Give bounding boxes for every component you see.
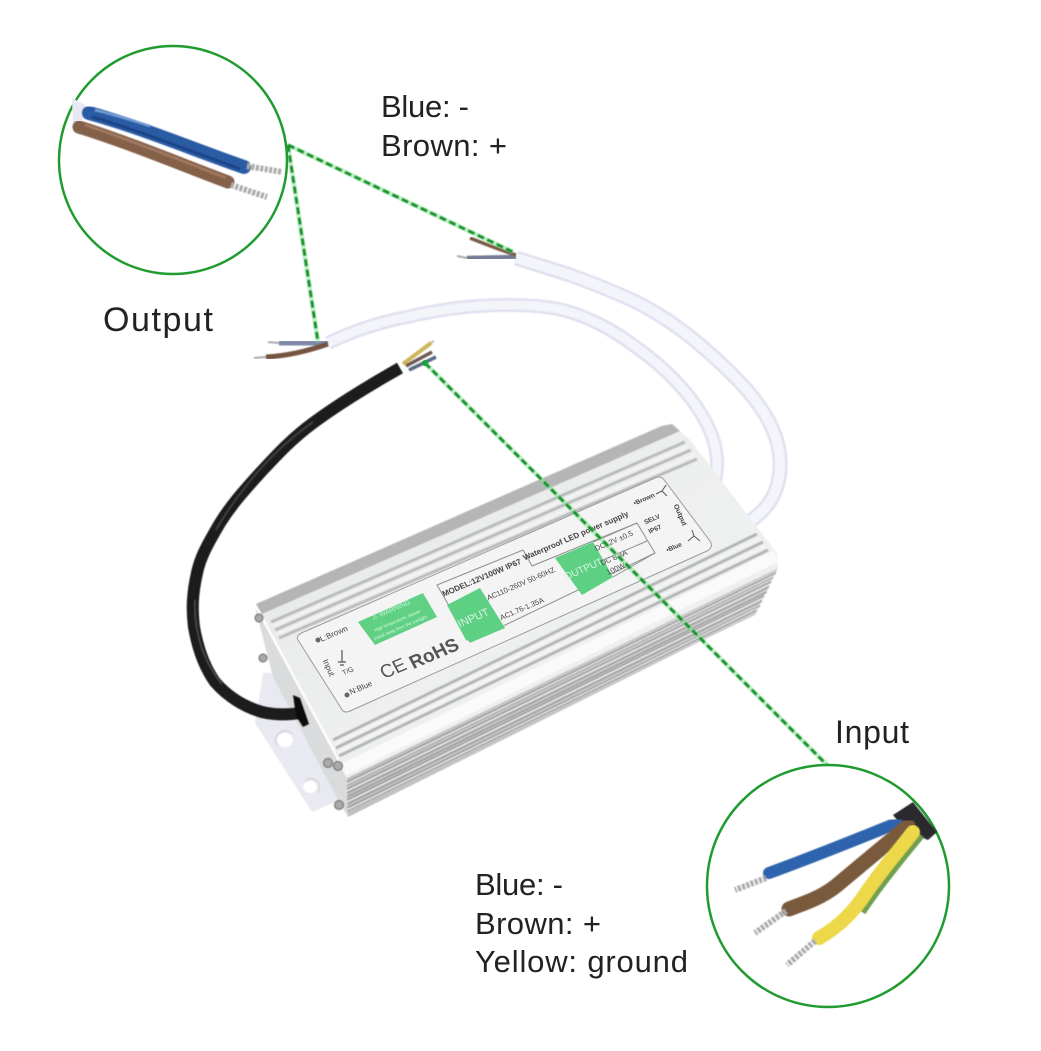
output side label: Output	[672, 503, 688, 528]
white output cable, outer	[516, 258, 780, 524]
ribbed side face	[347, 568, 778, 817]
input wires at black cable end	[403, 341, 436, 370]
RoHS mark: RoHS	[406, 635, 463, 674]
output detail circle	[59, 46, 287, 274]
power supply body	[255, 424, 778, 817]
neutral terminal: N:Blue	[348, 679, 374, 696]
blue wire	[735, 823, 897, 890]
input side label: Input	[321, 658, 337, 678]
input key line 1: Blue: -	[475, 867, 563, 902]
output wire colour key	[381, 89, 507, 163]
brown output terminal: •Brown	[632, 492, 656, 507]
ground symbol	[338, 650, 346, 665]
brown wire detail	[79, 125, 267, 197]
blue output terminal: •Blue	[665, 541, 684, 554]
CE mark: CE	[376, 655, 410, 684]
neutral dot	[344, 692, 350, 698]
black input cable	[193, 368, 400, 714]
model text: MODEL:12V100W IP67	[441, 557, 523, 598]
black sheath	[893, 802, 937, 840]
cable grommet	[293, 695, 309, 727]
input label: INPUT	[456, 606, 492, 630]
output key line 2: Brown: +	[381, 128, 507, 163]
fuse text: T/G	[341, 666, 355, 677]
input voltage: AC110-260V 50-60HZ	[485, 565, 557, 602]
leader anchor dot	[422, 360, 428, 366]
output heading: Output	[103, 301, 214, 339]
output voltage: DC12V ±0.5	[593, 529, 635, 553]
yellow wire	[787, 832, 921, 965]
wires at end of inner white cable	[254, 342, 328, 358]
output key line 1: Blue: -	[381, 89, 469, 124]
leader lines	[288, 145, 827, 765]
input green block	[447, 588, 505, 642]
selv text: SELV	[643, 513, 662, 526]
warning badge	[358, 593, 437, 645]
input detail circle	[707, 765, 949, 1007]
warning badge: install away from the sunlight	[373, 614, 428, 641]
warning badge: High temperature, please	[373, 608, 422, 633]
white sheath stub	[72, 98, 85, 135]
input key line 3: Yellow: ground	[475, 944, 688, 979]
live terminal: L:Brown	[318, 624, 349, 644]
live dot	[316, 638, 320, 642]
wires at end of outer white cable	[457, 238, 516, 258]
mounting flange	[255, 673, 340, 812]
screws	[255, 614, 344, 810]
output terminal symbols	[656, 485, 700, 541]
label panel	[297, 477, 711, 712]
input key line 2: Brown: +	[475, 906, 601, 941]
input heading: Input	[835, 714, 909, 750]
blue wire detail	[89, 110, 282, 172]
output label: OUTPUT	[562, 557, 605, 583]
input current: AC1.76-1.35A	[498, 596, 545, 622]
output power: 100W	[605, 561, 628, 577]
output green block	[555, 542, 613, 595]
warning badge: ⚠ WARNING	[370, 599, 412, 622]
brown wire	[755, 826, 908, 933]
end face	[255, 607, 348, 817]
top face	[256, 424, 778, 778]
ip rating: IP67	[648, 524, 663, 535]
output table rules	[593, 523, 655, 577]
spec table outline	[437, 523, 655, 642]
product name: Waterproof LED power supply	[521, 509, 631, 562]
input wire colour key	[475, 867, 688, 979]
output current: DC 8.3A	[599, 548, 629, 567]
white output cable, inner	[328, 305, 717, 482]
